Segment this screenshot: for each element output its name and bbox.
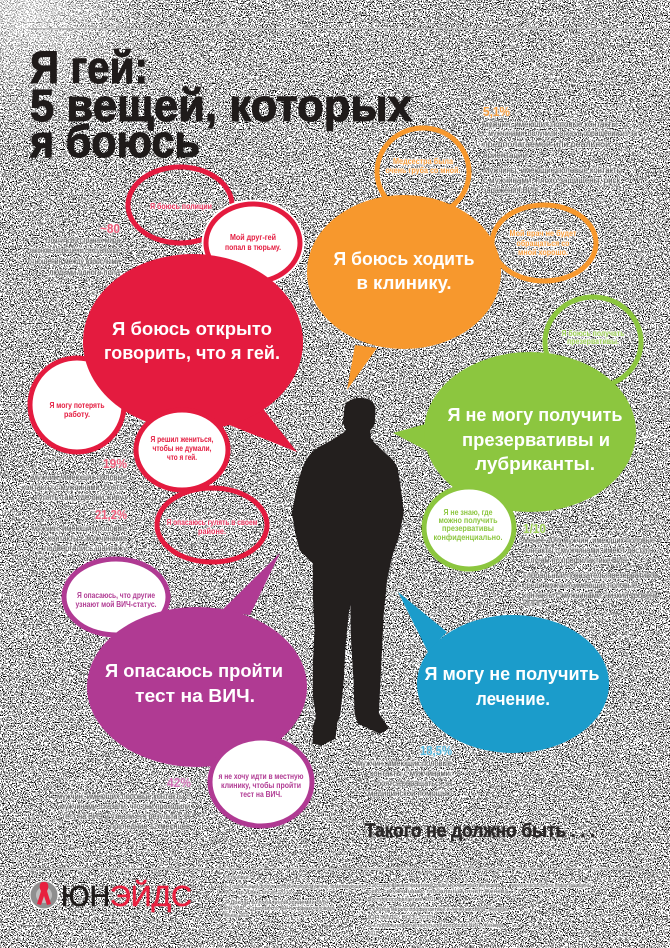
stat: 42 percent: тест на ВИЧ и узнали его результат за xyxy=(62,812,190,821)
references: 2. Доклад о глобальной эпидемии ВИЧ xyxy=(224,899,328,906)
title: 5 вещей, которых xyxy=(30,80,412,131)
logo: UNAIDS: ЭЙДС xyxy=(110,879,192,913)
bubble: where to get condoms xyxy=(424,487,514,569)
bubble: where to get condoms: Я не знаю, где xyxy=(444,508,493,517)
stat: 5.1 percent: 5,1% xyxy=(483,104,510,119)
references xyxy=(224,875,591,937)
bubble: where to get condoms: презервативы xyxy=(442,524,494,533)
main orange bubble xyxy=(307,195,501,390)
bubble: doctor will not treat well: мной хорошо. xyxy=(518,248,568,257)
references: 2011 xyxy=(368,931,378,937)
bubble: doctor will not treat well xyxy=(492,205,596,281)
bubble: may lose job: Я могу потерять xyxy=(50,401,105,410)
panel: blue speech cluster: Я могу не получить xyxy=(424,663,600,684)
stat: 18.5 percent: 18,5% xyxy=(420,743,452,758)
panel: green speech cluster xyxy=(393,297,641,569)
stat: 5.1 percent: мужчин, имеющих половые контакты xyxy=(483,120,617,129)
bubble: doctor will not treat well: обращаться со xyxy=(516,239,570,248)
stat: 80 countries: Почти в 80 странах мира xyxy=(46,236,120,245)
references: секс с мужчинами, глобальный отчёт, Женева xyxy=(368,888,509,895)
references: ЮНЭЙДС. Стратегия по ВИЧ и правам человека xyxy=(224,904,335,912)
title xyxy=(29,42,412,167)
panel: purple speech cluster xyxy=(64,553,312,826)
stat: 21.2 percent xyxy=(32,507,128,553)
main orange bubble: в клинику. xyxy=(356,272,452,293)
stat: 1 in 10: услугам по профилактике ВИЧ xyxy=(523,556,627,565)
bubble: may lose job xyxy=(30,358,124,452)
references: 4. Обзор мер по профилактике и лечению ВИЧ, Женева xyxy=(368,907,509,913)
panel: orange speech cluster xyxy=(307,128,596,390)
lighter top-left corner of background xyxy=(0,0,170,140)
main red bubble: Я боюсь открыто xyxy=(112,318,272,339)
bubble: nurse rude: очень груба со мной. xyxy=(386,166,460,175)
bubble: others will learn status: узнают мой ВИЧ-статус. xyxy=(76,600,156,609)
stat: 21.2 percent: мужчин, имеющих половые xyxy=(32,524,128,533)
panel: blue speech cluster: лечение. xyxy=(476,688,550,709)
stat: 1 in 10: ИППП xyxy=(523,599,543,608)
stat: 18.5 percent: контакты с мужчинами, xyxy=(370,769,452,778)
stat: 18.5 percent xyxy=(357,743,453,798)
stat: 1 in 10 xyxy=(523,521,658,608)
bubble: friend in prison: попал в тюрьму. xyxy=(225,243,281,252)
main orange bubble: Я боюсь ходить xyxy=(334,248,474,269)
references: ЮНЭЙДС, ВОЗ, 2010 xyxy=(368,913,433,921)
stat: 80 countries: отношения между взрослыми xyxy=(28,257,120,266)
stat: 80 countries: ~80 xyxy=(100,221,120,236)
stat: 5.1 percent: с мужчинами, плохо защищены, риск xyxy=(483,176,620,185)
bubble: where to get condoms: можно получить xyxy=(438,516,498,525)
title: я боюсь xyxy=(29,116,200,167)
references: Доступ к профилактике, 2011 xyxy=(368,897,436,903)
stat: 1 in 10: Глобальный показатель презервативов xyxy=(523,571,658,580)
references: 5. Глобальная отчётность по вопросам ВИЧ, Женева xyxy=(368,923,504,929)
stat: 5.1 percent: с мужчинами, получили отказ в обращении из-за xyxy=(483,129,637,138)
stat: 21.2 percent: контакты с мужчинами, xyxy=(48,534,127,543)
stat: 21.2 percent: подвергались шантажу xyxy=(44,544,127,553)
icon: man silhouette xyxy=(292,398,403,745)
closing statement: Такого не должно быть . . . xyxy=(365,821,595,842)
main purple bubble: Я опасаюсь пройти xyxy=(105,660,283,681)
bubble: afraid to walk in neighbourhood: Я опасаюсь гулять в своем xyxy=(166,518,258,527)
bubble: local clinic: я не хочу идти в местную xyxy=(218,772,304,781)
main red bubble: говорить, что я гей. xyxy=(104,342,280,363)
main purple bubble xyxy=(87,553,307,767)
stat: 5.1 percent: Мужчины, имеющие половые контакты xyxy=(483,166,622,175)
bubble: decided to marry: Я решил жениться, xyxy=(150,435,214,444)
bubble: nurse rude: Медсестра была xyxy=(393,157,453,166)
stat: 18.5 percent: медицинской помощью xyxy=(368,789,452,798)
stat: 5.1 percent: заражения ВИЧ xyxy=(483,186,538,195)
stat: 21.2 percent: 21,2% xyxy=(95,507,127,522)
bottom rule xyxy=(28,868,645,870)
stat: 1 in 10: контакты с мужчинами, имеют доступ к xyxy=(523,546,655,555)
stat: 42 percent: мужчинами, сказали, что они проходили xyxy=(60,802,190,811)
stat: 19 percent: гулять там, где они живут xyxy=(36,493,127,502)
bubble: friend in prison xyxy=(206,204,300,282)
main purple bubble: тест на ВИЧ. xyxy=(135,685,255,706)
title: Я гей: xyxy=(30,42,148,93)
bubble: afraid to get condoms: Я боюсь получать xyxy=(562,329,625,338)
stat: 1 in 10: контакты с мужчинами, низкий уровень xyxy=(523,591,658,600)
stat: 5.1 percent xyxy=(483,104,637,195)
bubble: afraid to get condoms xyxy=(545,297,641,387)
stat: 5.1 percent: предполагаемой или реальной xyxy=(483,140,610,149)
stat: 5.1 percent: ориентации xyxy=(483,151,527,160)
bubble: local clinic xyxy=(210,738,312,826)
bubble: others will learn status: Я опасаюсь, что другие xyxy=(77,591,155,600)
bubble: afraid to walk in neighbourhood xyxy=(157,488,267,562)
stat: 42 percent: мужчин, имеющих половые контакты с xyxy=(57,792,190,801)
stat: 42 percent: последние 12 месяцев xyxy=(110,822,190,831)
bubble: others will learn status xyxy=(64,559,168,635)
main green bubble xyxy=(393,352,636,512)
top rule xyxy=(28,28,643,30)
logo: UNAIDS: ЮН xyxy=(61,881,110,913)
bubble: nurse rude xyxy=(377,128,469,216)
bubble: may lose job: работу. xyxy=(64,410,90,419)
references: Источники: xyxy=(224,875,250,881)
stat: 42 percent xyxy=(57,775,191,831)
bubble: police fear: Я боюсь полиции xyxy=(150,202,212,211)
bubble: police fear xyxy=(128,167,232,243)
references: www.unaids.org Все права защищены xyxy=(512,883,591,889)
stat: 19 percent: контакты с мужчинами, боятся xyxy=(22,483,127,492)
panel: red speech cluster xyxy=(30,167,303,562)
logo: UNAIDS xyxy=(30,879,192,913)
stat: 18.5 percent: мужчин, имеющих половые xyxy=(357,759,453,768)
stat: 18.5 percent: боятся обращаться за xyxy=(377,779,452,788)
bubble: doctor will not treat well: Мой врач не будет xyxy=(510,229,577,238)
bubble: local clinic: тест на ВИЧ. xyxy=(240,790,282,799)
references: Женева, 2010 xyxy=(224,913,248,919)
references: 1. Глобальный форум по ВИЧ среди мужчин, практикующих xyxy=(224,883,364,890)
bubble: decided to marry xyxy=(136,410,228,490)
stat: 19 percent: мужчин, имеющих половые xyxy=(32,473,128,482)
stat: 80 countries xyxy=(28,221,121,277)
stat: 80 countries: людьми одного пола xyxy=(49,268,121,277)
references: 3. Исследование показателей среди мужчин, практикующих xyxy=(368,882,498,889)
bubble: friend in prison: Мой друг-гей xyxy=(230,233,276,242)
main red bubble xyxy=(83,254,303,452)
bubble: afraid to walk in neighbourhood: районе. xyxy=(198,527,226,536)
bubble: decided to marry: что я гей. xyxy=(167,453,197,462)
icon: globe with ribbon xyxy=(30,881,58,909)
stat: 19 percent: 19% xyxy=(103,456,127,471)
stat: 1 in 10: 1/10 xyxy=(523,521,546,536)
references: М. и др. The Lancet, 2012 xyxy=(224,890,292,896)
stat: 80 countries: законом запрещены сексуальные xyxy=(29,246,120,255)
panel: blue speech cluster xyxy=(398,592,609,753)
stat: 42 percent: 42% xyxy=(167,775,191,790)
stat: 1 in 10: среди мужчин, имеющих половые xyxy=(523,581,637,590)
stat: 1 in 10: Менее 10% мужчин, имеющих половые xyxy=(523,536,655,545)
bubble: afraid to get condoms: презервативы. xyxy=(567,337,619,346)
main green bubble: лубриканты. xyxy=(475,453,595,474)
main green bubble: презервативы и xyxy=(462,429,610,450)
stat: 19 percent xyxy=(22,456,128,502)
bubble: decided to marry: чтобы не думали, xyxy=(152,444,212,453)
main green bubble: Я не могу получить xyxy=(448,404,622,425)
bubble: where to get condoms: конфиденциально. xyxy=(434,533,502,542)
bubble: local clinic: клинику, чтобы пройти xyxy=(221,781,301,790)
